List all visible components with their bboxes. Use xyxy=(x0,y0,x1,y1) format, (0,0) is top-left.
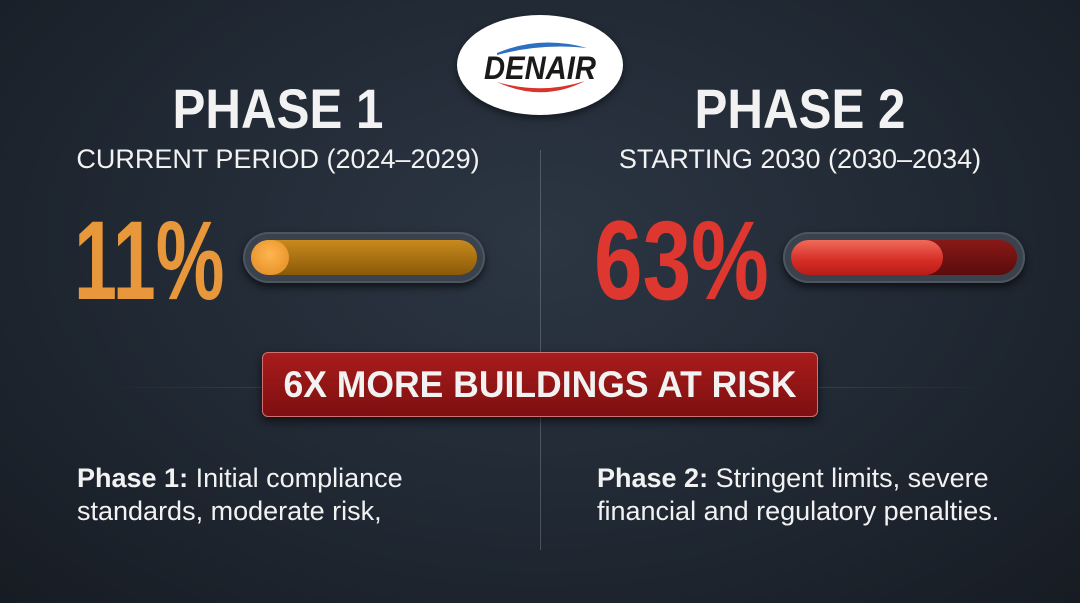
bar: phase 1 xyxy=(243,232,485,283)
heading: phase 2: PHASE 2 xyxy=(695,77,905,140)
banner: 6X MORE BUILDINGS AT RISK xyxy=(283,364,797,405)
logo xyxy=(457,15,623,115)
text: phase 1 note: standards, moderate risk, xyxy=(77,496,382,526)
bar: phase 2 xyxy=(783,232,1025,283)
stat: 63%: 63% xyxy=(594,198,769,323)
subtitle: phase 1: CURRENT PERIOD (2024–2029) xyxy=(76,144,480,174)
subtitle: phase 2: STARTING 2030 (2030–2034) xyxy=(619,144,981,174)
text: phase 2 note: financial and regulatory penalties. xyxy=(597,496,999,526)
text: phase 2 note xyxy=(597,463,999,526)
text: phase 1 note: Phase 1: Initial compliance xyxy=(77,463,403,493)
text: phase 1 note xyxy=(77,463,403,526)
logo: DENAIR xyxy=(484,50,596,86)
banner xyxy=(262,352,818,417)
text: phase 2 note: Phase 2: Stringent limits, severe xyxy=(597,463,989,493)
stat: 11%: 11% xyxy=(74,198,224,323)
heading: phase 1: PHASE 1 xyxy=(173,77,383,140)
